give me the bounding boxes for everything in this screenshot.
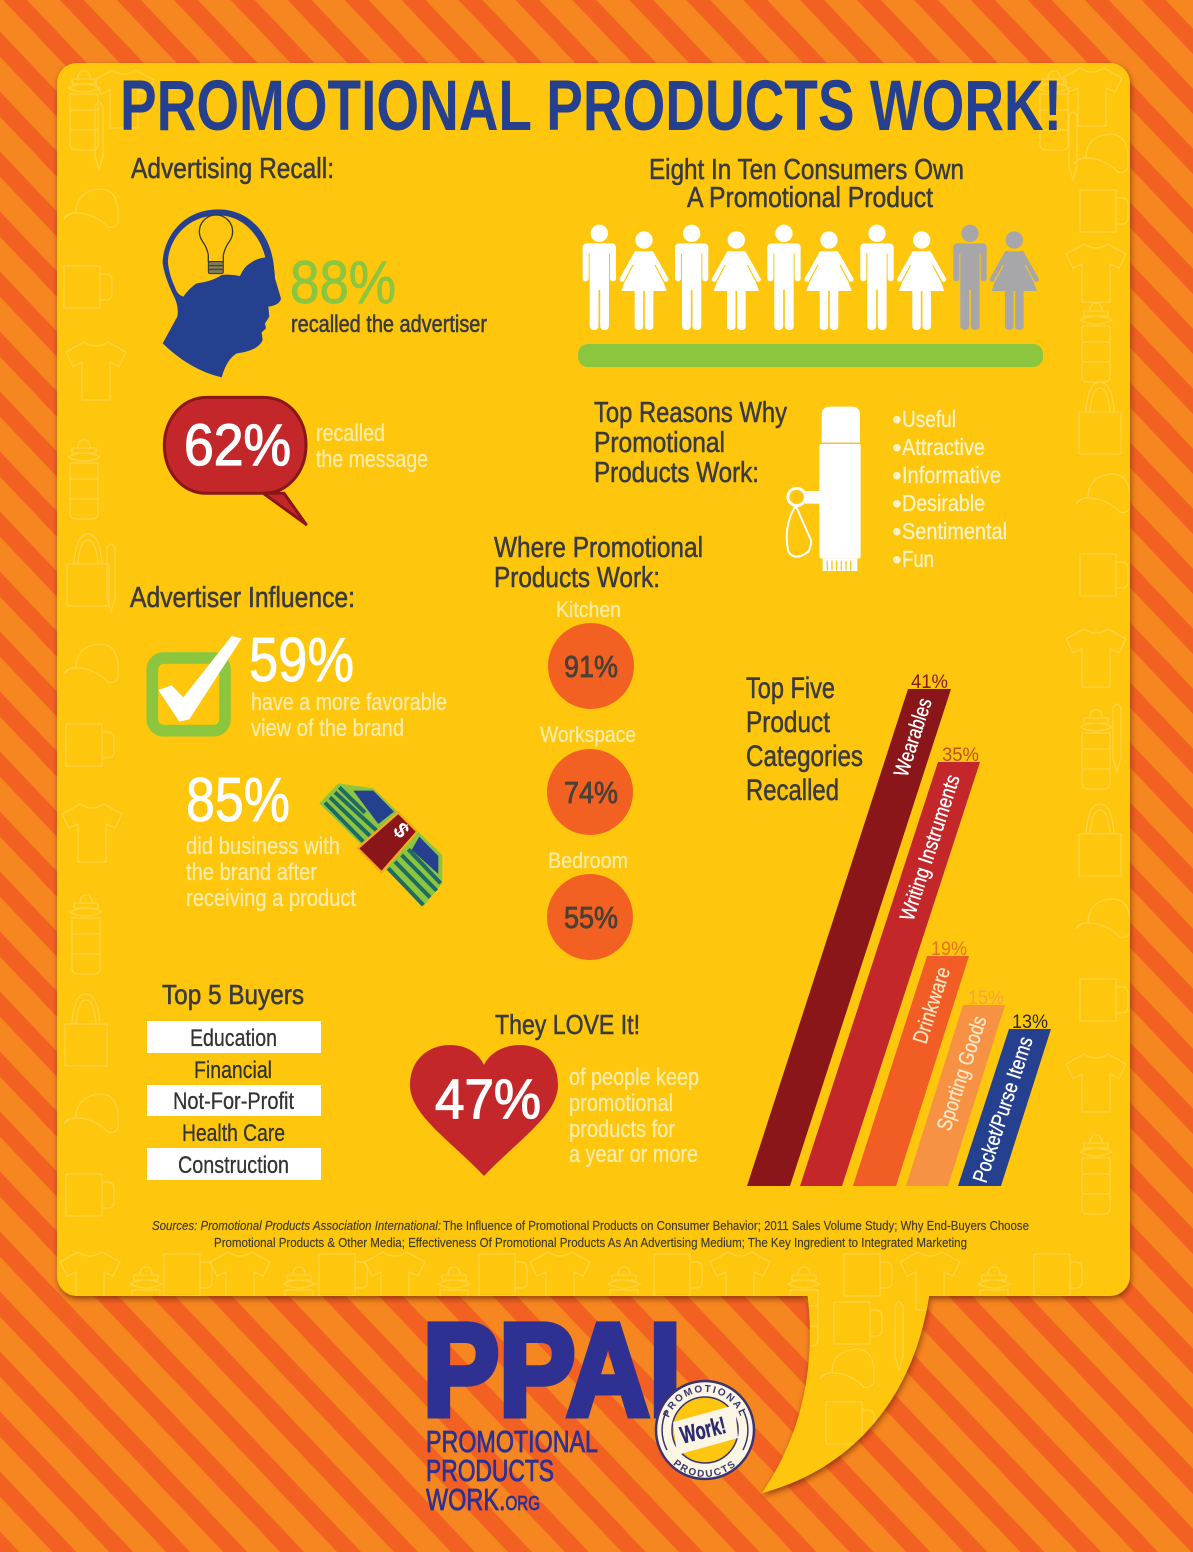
- seal: promotional products work: Work!: [678, 1412, 729, 1449]
- location: kitchen: 91%: [564, 649, 618, 684]
- icon: red speech bubble: [164, 397, 306, 524]
- location: workspace: Workspace: [540, 722, 636, 747]
- seal: promotional products work: PRODUCTS: [673, 1459, 735, 1477]
- green bar: [578, 344, 1043, 367]
- buyer: education: Education: [190, 1025, 277, 1052]
- label: recalled the message: recalled: [316, 420, 385, 447]
- sources: [152, 1218, 1029, 1250]
- location: workspace: [540, 722, 636, 835]
- buyer: construction: Construction: [178, 1152, 289, 1179]
- list: reasons: [892, 404, 1007, 575]
- location: kitchen: Kitchen: [556, 597, 621, 622]
- heading: [649, 154, 964, 214]
- section: eight in ten consumers: [578, 154, 1043, 367]
- url lines: WORK.ORG: [426, 1482, 540, 1517]
- bar: writing instruments: 35%: [942, 745, 979, 766]
- section: top 5 buyers: [147, 979, 321, 1180]
- location: bedroom: 55%: [564, 900, 618, 935]
- bar: sporting goods: Sporting Goods: [933, 1013, 992, 1134]
- label: did business: did business with: [186, 833, 340, 860]
- label: did business: the brand after: [186, 859, 317, 886]
- heading: Eight In Ten Consumers Own: [649, 154, 964, 186]
- icon: money roll: [319, 783, 442, 907]
- label: favorable view: [251, 689, 447, 742]
- logo: PPAI: [423, 1296, 681, 1517]
- list: reasons: Attractive: [902, 434, 985, 460]
- label: keep a year or more: promotional: [569, 1090, 673, 1117]
- url lines: PROMOTIONAL: [426, 1424, 598, 1459]
- heading: Advertising Recall:: [131, 153, 334, 185]
- icon: heart: [410, 1045, 558, 1176]
- url lines: PRODUCTS: [426, 1453, 554, 1488]
- label: favorable view: view of the brand: [251, 715, 404, 742]
- section: top reasons: [594, 397, 1007, 575]
- bar: writing instruments: Writing Instruments: [896, 772, 965, 924]
- buyer: construction: [147, 1148, 321, 1180]
- list: reasons: •: [892, 544, 902, 575]
- label: did business: [186, 833, 356, 912]
- label: keep a year or more: a year or more: [569, 1141, 698, 1168]
- label: recalled the advertiser: recalled the advertiser: [291, 311, 487, 338]
- section: where promotional products work: [494, 532, 703, 960]
- stat: 47%: 47%: [435, 1067, 541, 1130]
- heading: Categories: [746, 740, 863, 773]
- label: favorable view: have a more favorable: [251, 689, 447, 716]
- bar: wearables: [747, 672, 951, 1186]
- label: keep a year or more: products for: [569, 1116, 675, 1143]
- bar: wearables: Wearables: [890, 695, 937, 780]
- bar: drinkware: 19%: [931, 939, 967, 960]
- list: reasons: Desirable: [902, 490, 985, 516]
- location: workspace: 74%: [564, 775, 618, 810]
- heading: Where Promotional: [494, 532, 703, 564]
- heading: Recalled: [746, 774, 839, 807]
- section: advertiser influence: [130, 582, 447, 912]
- heading: Products Work:: [594, 457, 759, 489]
- seal: promotional products work: PROMOTIONAL: [662, 1384, 746, 1418]
- icon: money roll: $: [388, 818, 414, 843]
- heading: Top 5 Buyers: [162, 979, 304, 1010]
- sources: Sources: Promotional Products Association International:: [152, 1218, 441, 1233]
- section: they love it: [410, 1009, 699, 1176]
- section: advertising recall: [131, 153, 487, 524]
- label: recalled the message: [316, 420, 428, 473]
- bar: drinkware: [853, 939, 969, 1186]
- faint product outline pattern: [60, 68, 1130, 1444]
- buyer: health care: Health Care: [182, 1120, 285, 1147]
- icon: head with light bulb: [163, 209, 281, 377]
- seal: promotional products work: [654, 1380, 756, 1480]
- heading: Product: [746, 706, 831, 739]
- list: reasons: •: [892, 404, 902, 435]
- list: reasons: Useful: [902, 406, 956, 432]
- url lines: [426, 1424, 598, 1517]
- heading: [594, 397, 787, 489]
- icon: people row: [583, 225, 1037, 330]
- buyer: education: [147, 1021, 321, 1053]
- list: reasons: Fun: [902, 546, 934, 572]
- heading: Top Reasons Why: [594, 397, 787, 429]
- bar: pocket purse items: Pocket/Purse Items: [969, 1034, 1038, 1186]
- stat: 59%: 59%: [249, 626, 354, 695]
- list: reasons: •: [892, 432, 902, 463]
- list: reasons: •: [892, 460, 902, 491]
- buyer: not-for-profit: Not-For-Profit: [173, 1088, 294, 1115]
- sources: The Influence of Promotional Products on Consumer Behavior; 2011 Sales Volume Study; Why End-Buyers Choose: [443, 1218, 1029, 1233]
- stat: 62%: 62%: [184, 413, 291, 478]
- heading: Promotional: [594, 427, 725, 459]
- buyer: financial: Financial: [194, 1057, 272, 1084]
- heading: Top Five: [746, 672, 835, 705]
- stat: 85%: 85%: [186, 766, 290, 835]
- heading: [494, 532, 703, 594]
- heading: Advertiser Influence:: [130, 582, 355, 614]
- bar: drinkware: Drinkware: [909, 964, 955, 1047]
- bar: sporting goods: 15%: [968, 988, 1004, 1009]
- heading: [746, 672, 863, 807]
- label: did business: receiving a product: [186, 885, 356, 912]
- icon: thermos: [787, 407, 861, 571]
- location: bedroom: Bedroom: [548, 848, 628, 873]
- label: keep a year or more: [569, 1064, 699, 1168]
- bar: sporting goods: [906, 988, 1005, 1186]
- bar: wearables: 41%: [911, 672, 948, 693]
- heading: A Promotional Product: [687, 182, 933, 214]
- label: keep a year or more: of people keep: [569, 1064, 699, 1091]
- wordmark: PPAI: [423, 1296, 681, 1443]
- list: reasons: •: [892, 516, 902, 547]
- section: top five categories: [746, 672, 1051, 1186]
- location: kitchen: [548, 597, 634, 709]
- location: bedroom: [547, 848, 633, 960]
- heading: They LOVE It!: [495, 1009, 640, 1040]
- list: reasons: Informative: [902, 462, 1001, 488]
- bar: pocket purse items: 13%: [1012, 1012, 1048, 1033]
- bar: writing instruments: [800, 745, 980, 1186]
- sources: Promotional Products & Other Media; Effectiveness Of Promotional Products As An Advertising Medium; The Key Ingredient to Integrated Marketing: [214, 1235, 967, 1250]
- heading: Products Work:: [494, 562, 660, 594]
- stat: 88%: 88%: [290, 249, 396, 316]
- list: reasons: •: [892, 488, 902, 519]
- icon: green checkbox: [152, 636, 242, 731]
- list: reasons: Sentimental: [902, 518, 1007, 544]
- label: recalled the message: the message: [316, 446, 428, 473]
